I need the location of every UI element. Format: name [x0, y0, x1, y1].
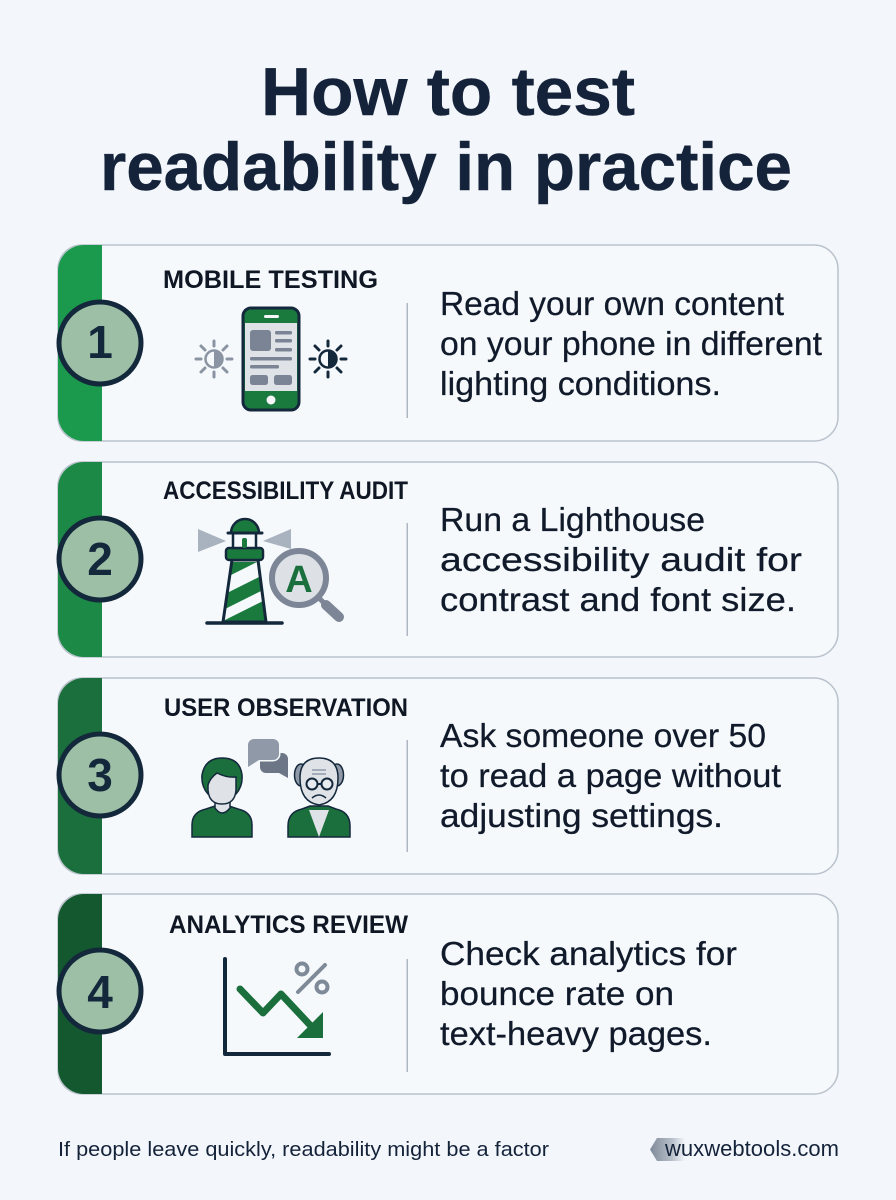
icon: young and older person talking [192, 739, 350, 837]
description text [440, 935, 737, 1052]
description text: to read a page without [440, 757, 781, 794]
description text [440, 717, 781, 834]
icon: lighthouse and magnifier [198, 519, 339, 630]
number badge 1: 1 [87, 316, 113, 368]
heading: accessibility audit: ACCESSIBILITY AUDIT [163, 477, 408, 505]
description text: adjusting settings. [440, 797, 723, 834]
description text: accessibility audit for [440, 541, 802, 578]
panel: analytics review [58, 894, 838, 1094]
number badge 2: 2 [87, 533, 113, 585]
heading: user observation: USER OBSERVATION [164, 694, 408, 722]
description text: bounce rate on [440, 975, 674, 1012]
description text: lighting conditions. [440, 365, 721, 402]
description text [440, 285, 822, 402]
divider line [406, 959, 408, 1072]
divider line [406, 523, 408, 636]
divider line [406, 303, 408, 418]
title [100, 54, 792, 205]
number badge 1 [59, 302, 141, 384]
number badge 2 [59, 518, 141, 600]
title: How to test [261, 54, 635, 130]
icon: phone with light and dark suns [196, 308, 346, 410]
description text: Run a Lighthouse [440, 501, 705, 538]
description text: Check analytics for [440, 935, 737, 972]
footer note: If people leave quickly, readability might be a factor [58, 1139, 549, 1161]
divider line [406, 740, 408, 852]
heading: mobile testing: MOBILE TESTING [163, 266, 378, 294]
title: readability in practice [100, 129, 792, 205]
panel: accessibility audit [58, 462, 838, 657]
number badge 4 [59, 950, 141, 1032]
description text: Read your own content [440, 285, 784, 322]
panel: mobile testing [58, 245, 838, 441]
description text [440, 501, 802, 618]
number badge 3: 3 [87, 749, 113, 801]
footer brand: wuxwebtools.com [664, 1136, 839, 1161]
description text: contrast and font size. [440, 581, 796, 618]
number badge 4: 4 [87, 966, 113, 1018]
icon: lighthouse and magnifier: A [285, 559, 313, 601]
description text: text-heavy pages. [440, 1015, 712, 1052]
heading: analytics review: ANALYTICS REVIEW [169, 911, 408, 939]
description text: Ask someone over 50 [440, 717, 766, 754]
number badge 3 [59, 734, 141, 816]
panel: user observation [58, 678, 838, 874]
icon: falling line chart with percent [225, 959, 329, 1054]
description text: on your phone in different [440, 325, 822, 362]
